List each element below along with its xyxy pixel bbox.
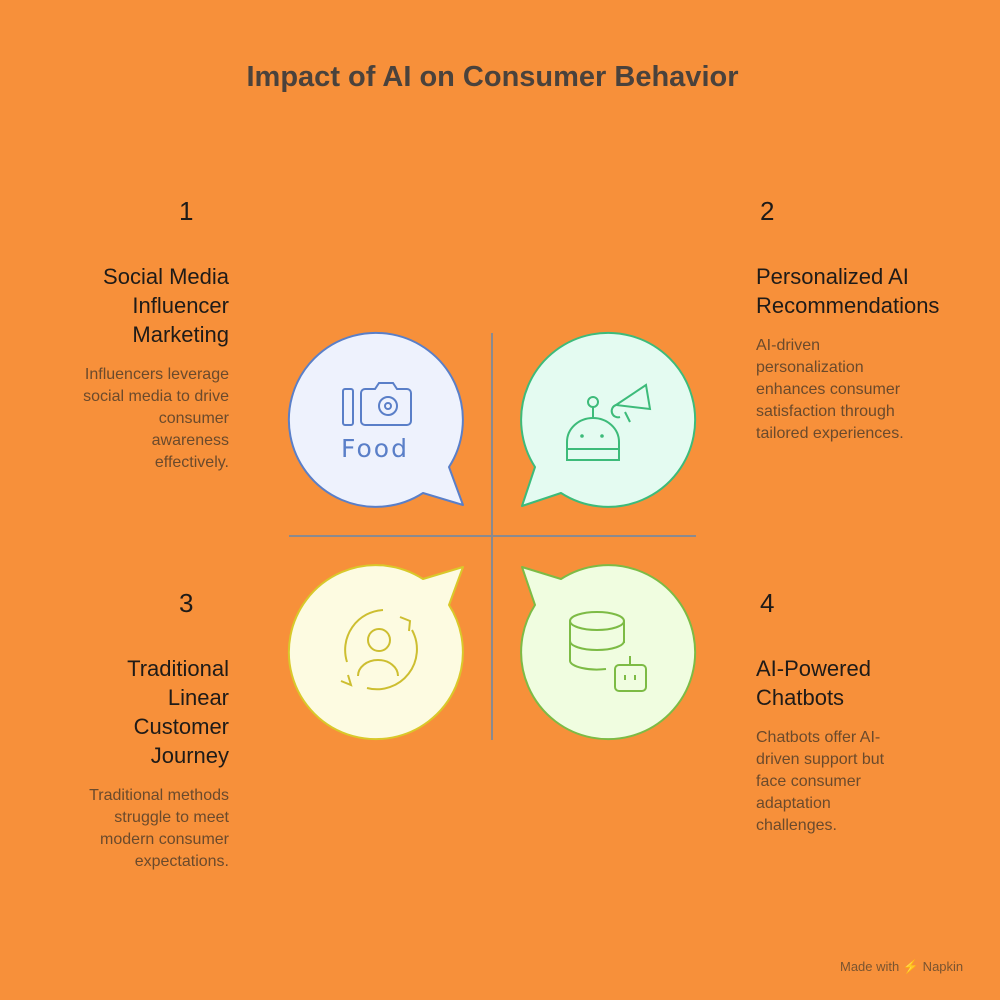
bubble 2 bbox=[521, 333, 695, 507]
desc 3: expectations. bbox=[135, 853, 229, 870]
heading 2: Personalized AI bbox=[756, 264, 909, 289]
desc 2: personalization bbox=[756, 359, 864, 376]
desc 2: AI-driven bbox=[756, 337, 820, 354]
desc 4: Chatbots offer AI- bbox=[756, 729, 880, 746]
desc 3: struggle to meet bbox=[114, 809, 229, 826]
desc 1: effectively. bbox=[155, 454, 229, 471]
heading 4: AI-Powered bbox=[756, 656, 871, 681]
number 1: 1 bbox=[179, 196, 193, 226]
desc 4: driven support but bbox=[756, 751, 884, 768]
desc 2: enhances consumer bbox=[756, 381, 900, 398]
number 4: 4 bbox=[760, 588, 774, 618]
desc 2: satisfaction through bbox=[756, 403, 895, 420]
desc 4: adaptation bbox=[756, 795, 831, 812]
bubble 3 bbox=[289, 565, 463, 739]
heading 1: Social Media bbox=[103, 264, 229, 289]
desc 1: consumer bbox=[159, 410, 229, 427]
heading 1: Influencer bbox=[132, 293, 229, 318]
title: Impact of AI on Consumer Behavior bbox=[246, 61, 738, 93]
desc 1: awareness bbox=[152, 432, 229, 449]
desc 1: Influencers leverage bbox=[85, 366, 229, 383]
heading 3: Traditional bbox=[127, 656, 229, 681]
block 1 text bbox=[83, 264, 229, 471]
icon: robot megaphone bbox=[567, 385, 650, 460]
bubble 1: Food bbox=[341, 434, 409, 463]
desc 3 bbox=[89, 787, 229, 870]
icon: person cycle bbox=[341, 610, 417, 689]
heading 2 bbox=[756, 264, 939, 318]
desc 4 bbox=[756, 729, 884, 834]
number 2: 2 bbox=[760, 196, 774, 226]
desc 2: tailored experiences. bbox=[756, 425, 904, 442]
heading 1: Marketing bbox=[132, 322, 229, 347]
block 4 text bbox=[756, 656, 884, 834]
block 3 text bbox=[89, 656, 229, 870]
number 3: 3 bbox=[179, 588, 193, 618]
desc 1: social media to drive bbox=[83, 388, 229, 405]
heading 2: Recommendations bbox=[756, 293, 939, 318]
heading 4: Chatbots bbox=[756, 685, 844, 710]
heading 3: Journey bbox=[151, 743, 229, 768]
bubble 4 bbox=[521, 565, 695, 739]
desc 1 bbox=[83, 366, 229, 471]
desc 3: modern consumer bbox=[100, 831, 229, 848]
icon: camera food bbox=[343, 383, 411, 425]
desc 4: face consumer bbox=[756, 773, 861, 790]
bubble 1 bbox=[289, 333, 463, 507]
heading 3 bbox=[127, 656, 229, 768]
desc 4: challenges. bbox=[756, 817, 837, 834]
heading 1 bbox=[103, 264, 229, 347]
heading 3: Customer bbox=[134, 714, 229, 739]
desc 3: Traditional methods bbox=[89, 787, 229, 804]
desc 2 bbox=[756, 337, 904, 442]
heading 4 bbox=[756, 656, 871, 710]
footer: made with napkin: Made with ⚡ Napkin bbox=[840, 959, 963, 974]
block 2 text bbox=[756, 264, 939, 442]
icon: database bot bbox=[570, 612, 646, 691]
heading 3: Linear bbox=[168, 685, 229, 710]
